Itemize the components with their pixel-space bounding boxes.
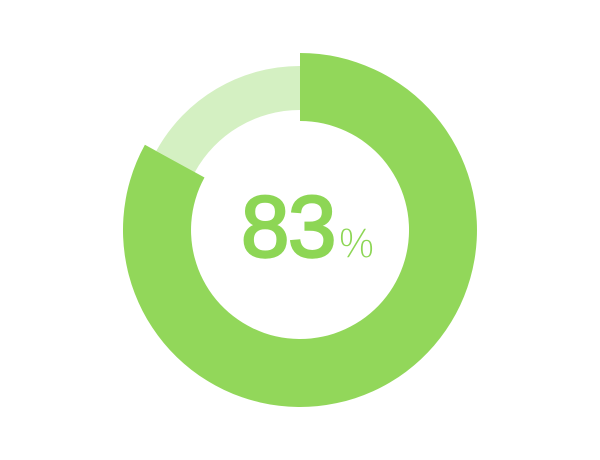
filled segment: 83 percent arc <box>123 53 477 407</box>
percent sign: % <box>339 220 374 268</box>
remaining segment: light green arc <box>156 66 300 172</box>
value: 83: 83 <box>241 178 336 276</box>
